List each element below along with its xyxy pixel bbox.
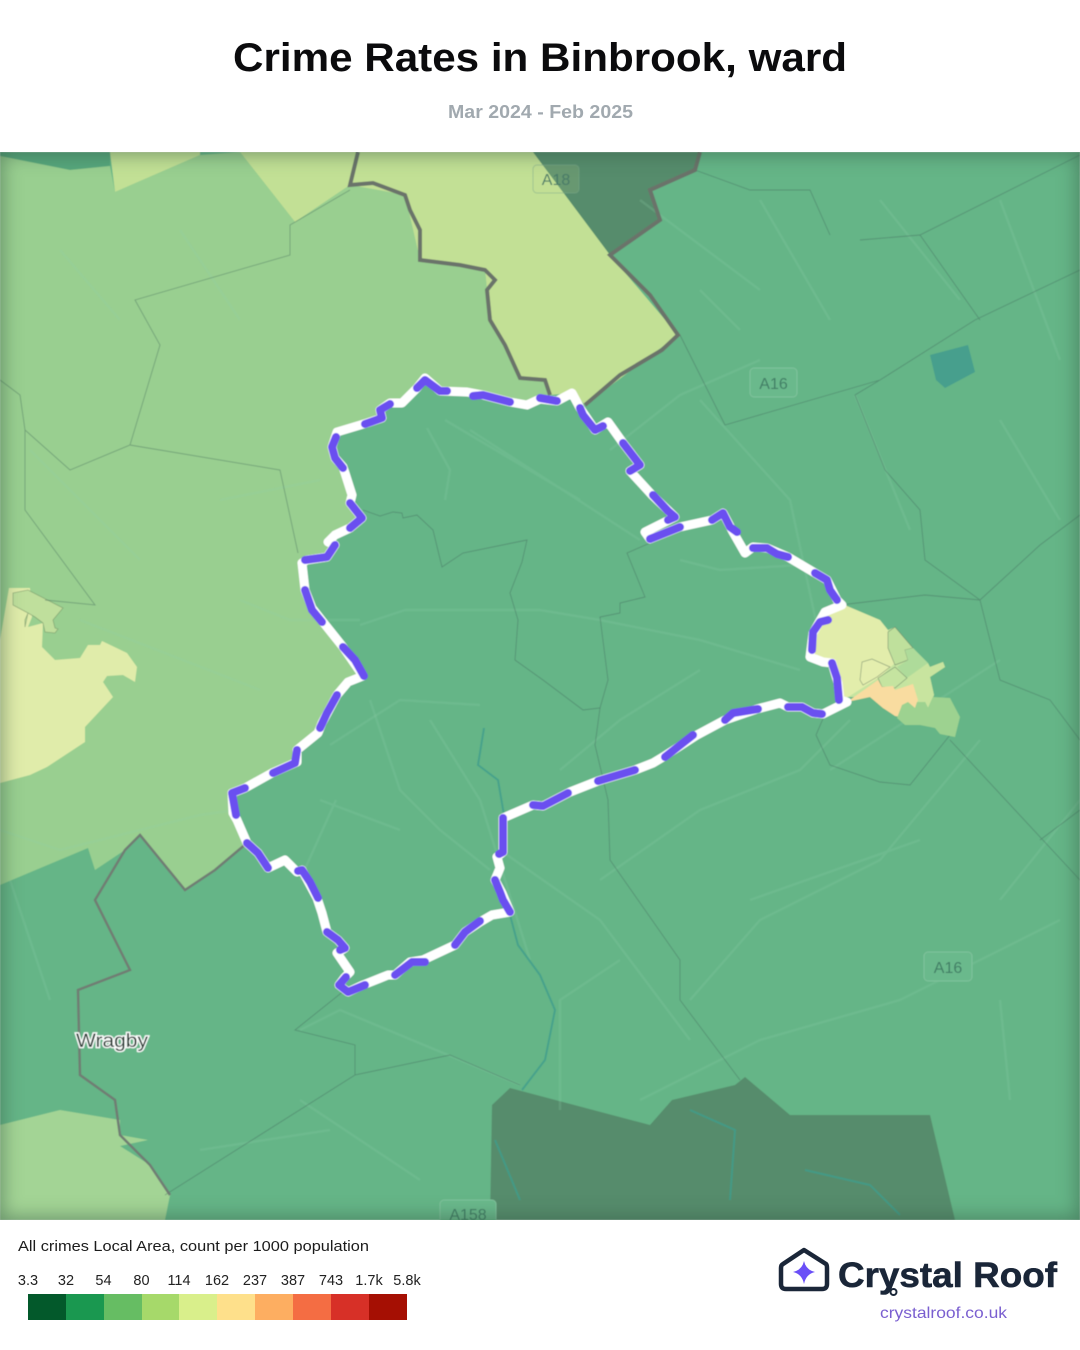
legend value labels: 743 (319, 1273, 343, 1289)
roads (244, 200, 1065, 1144)
town: green patch north (888, 627, 913, 665)
legend value labels: 5.8k (393, 1273, 421, 1289)
map base: main green area (0, 152, 1080, 1220)
region: bottom dark area (490, 1077, 955, 1220)
region: west small green patch (13, 590, 63, 633)
ward outline: white base (232, 378, 847, 992)
road label A16 south: A16 (934, 960, 962, 977)
logo icon: house with star (781, 1250, 827, 1289)
town: green patch east (897, 648, 928, 678)
choropleth map (0, 152, 1080, 1229)
ward outline: purple dashes (232, 380, 839, 992)
ward boundaries (0, 155, 1080, 1195)
region: west yellow area (0, 588, 137, 783)
road label A158: A158 (449, 1207, 487, 1224)
town: yellow main area (810, 603, 895, 700)
grey district boundary, south-west (78, 835, 247, 1195)
title: Crime Rates in Binbrook, ward (233, 36, 847, 80)
legend value labels: 54 (95, 1273, 112, 1289)
rivers (478, 728, 900, 1215)
road label A16 north: A16 (759, 376, 788, 393)
region: top dark high-contrast area (533, 152, 700, 255)
region: bottom-left light green (0, 1110, 170, 1220)
logo wordmark: Crystal Roof (838, 1256, 1057, 1295)
legend title: All crimes Local Area, count per 1000 population (18, 1239, 369, 1255)
legend value labels: 32 (58, 1273, 74, 1289)
town: green patch centre (878, 667, 907, 688)
town: orange area (847, 680, 918, 717)
region: top-left dark strip (0, 152, 110, 170)
legend value labels: 80 (133, 1273, 150, 1289)
road label A16 south (924, 952, 972, 981)
legend value labels: 114 (167, 1273, 191, 1289)
subtitle: date range: Mar 2024 - Feb 2025 (448, 102, 633, 122)
place label Wragby: Wragby (76, 1031, 149, 1052)
legend value labels: 162 (205, 1273, 229, 1289)
map edge vignette (0, 152, 1080, 1220)
town: green patch south (897, 697, 960, 737)
region: top-left yellow-green patches (110, 152, 200, 192)
grey thick district boundary, north (350, 152, 700, 405)
legend value labels (18, 1273, 421, 1289)
region: lake east (930, 345, 975, 388)
road label A18: A18 (542, 172, 570, 189)
town: green patch far east (924, 662, 945, 708)
legend value labels: 3.3 (18, 1273, 38, 1289)
road label A158 (439, 1199, 497, 1220)
legend value labels: 237 (243, 1273, 267, 1289)
region: top yellow-green wedge left (240, 152, 358, 222)
legend colour scale (28, 1294, 407, 1320)
road label A16 north (750, 368, 797, 397)
website url: crystalroof.co.uk (880, 1305, 1008, 1322)
region: top yellow-green area (350, 152, 678, 405)
road label A18 (533, 165, 579, 193)
town: pale sub-area (860, 659, 890, 685)
region: large light green area west of ward (0, 152, 550, 890)
legend value labels: 1.7k (355, 1273, 383, 1289)
town: base silhouette (848, 627, 918, 698)
legend value labels: 387 (281, 1273, 305, 1289)
